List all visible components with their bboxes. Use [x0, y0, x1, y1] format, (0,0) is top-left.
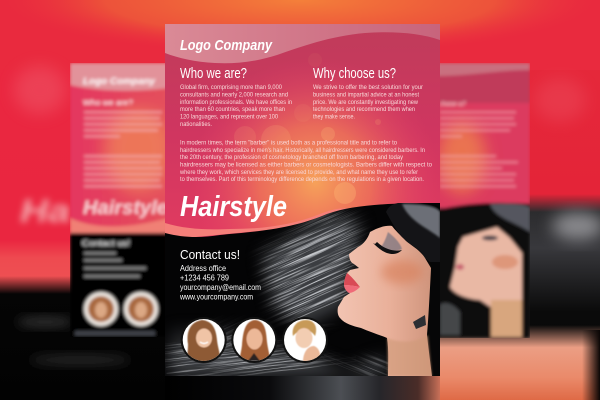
contact heading: Contact us!	[180, 247, 240, 262]
cheek blush	[381, 260, 423, 284]
bokeh lights	[234, 119, 381, 204]
lips	[344, 273, 360, 287]
earring	[413, 315, 426, 329]
text: why choose us: technologies and recommend them when	[313, 106, 415, 113]
portrait 1	[181, 317, 227, 363]
contact details	[179, 263, 261, 302]
blurred backdrop lettering: Ha	[20, 193, 70, 229]
contact details: www.yourcompany.com	[179, 292, 253, 302]
text: why choose us: business and impartial advice at an honest	[313, 92, 419, 98]
contact details: yourcompany@email.com	[180, 282, 261, 292]
left background flyer: Logo Company	[83, 76, 156, 86]
text: barber paragraph: hairdressers who specialize in men's hair. Historically, all hairdressers were considered barbers. In	[180, 147, 425, 154]
hair photo	[165, 202, 440, 376]
portrait 3	[282, 317, 328, 363]
hair behind neck	[430, 262, 440, 272]
eye shadow	[381, 232, 402, 251]
text: who we are: 120 languages, and represent over 100	[180, 114, 278, 120]
text: why choose us: they make sense.	[313, 114, 355, 120]
text: why choose us: We strive to offer the best solution for your	[313, 84, 424, 91]
heading: why choose us: Why choose us?	[313, 65, 396, 82]
hair strands	[165, 208, 388, 376]
main flyer	[163, 24, 440, 385]
neck shade	[387, 335, 432, 376]
logo: Logo Company	[180, 37, 273, 54]
left background flyer	[70, 63, 172, 337]
fringe	[386, 203, 440, 262]
text: why choose us	[313, 84, 424, 120]
left background flyer: Hairstyle	[83, 198, 168, 219]
text: barber paragraph: hairdressers may be licensed as either barbers or cosmetologists. Barbers differ with respect to	[180, 162, 432, 168]
text: barber paragraph: to themselves. Part of this terminology difference depends on the regulations in a given location.	[180, 176, 424, 183]
face	[338, 226, 432, 376]
left background flyer: Contact us!	[82, 239, 130, 248]
text: who we are: information professionals. We have offices in	[180, 99, 292, 106]
text: who we are: nationalities.	[180, 121, 212, 128]
text: barber paragraph	[179, 140, 432, 183]
contact details: +1234 456 789	[180, 272, 229, 282]
lower wave band	[165, 208, 348, 237]
text: who we are	[180, 84, 292, 128]
top wave band	[165, 24, 440, 63]
text: barber paragraph: In modern times, the term "barber" is used both as a professional title and to refer to	[180, 140, 397, 146]
hairstyle title: Hairstyle	[180, 191, 287, 223]
text: why choose us: price. We are constantly investigating new	[313, 99, 418, 106]
text: barber paragraph: the 20th century, the profession of cosmetology branched off from barbering, and today	[180, 154, 404, 161]
text: barber paragraph: where they work, which services they are licensed to provide, and what name they use to refer	[179, 169, 419, 176]
right background flyer: choose us?	[440, 99, 466, 108]
text: who we are: Global firm, comprising more than 9,000	[180, 84, 282, 91]
left background flyer: Who we are?	[83, 98, 133, 107]
text: who we are: more than 60 countries, speak more than	[180, 106, 285, 113]
eyelashes	[373, 242, 402, 254]
flyer background	[165, 32, 440, 237]
text: who we are: consultants and nearly 2,000 research and	[180, 92, 288, 98]
right background flyer	[436, 63, 530, 338]
portrait 2	[231, 317, 277, 363]
contact details: Address office	[180, 263, 226, 273]
heading: who we are: Who we are?	[180, 65, 247, 82]
